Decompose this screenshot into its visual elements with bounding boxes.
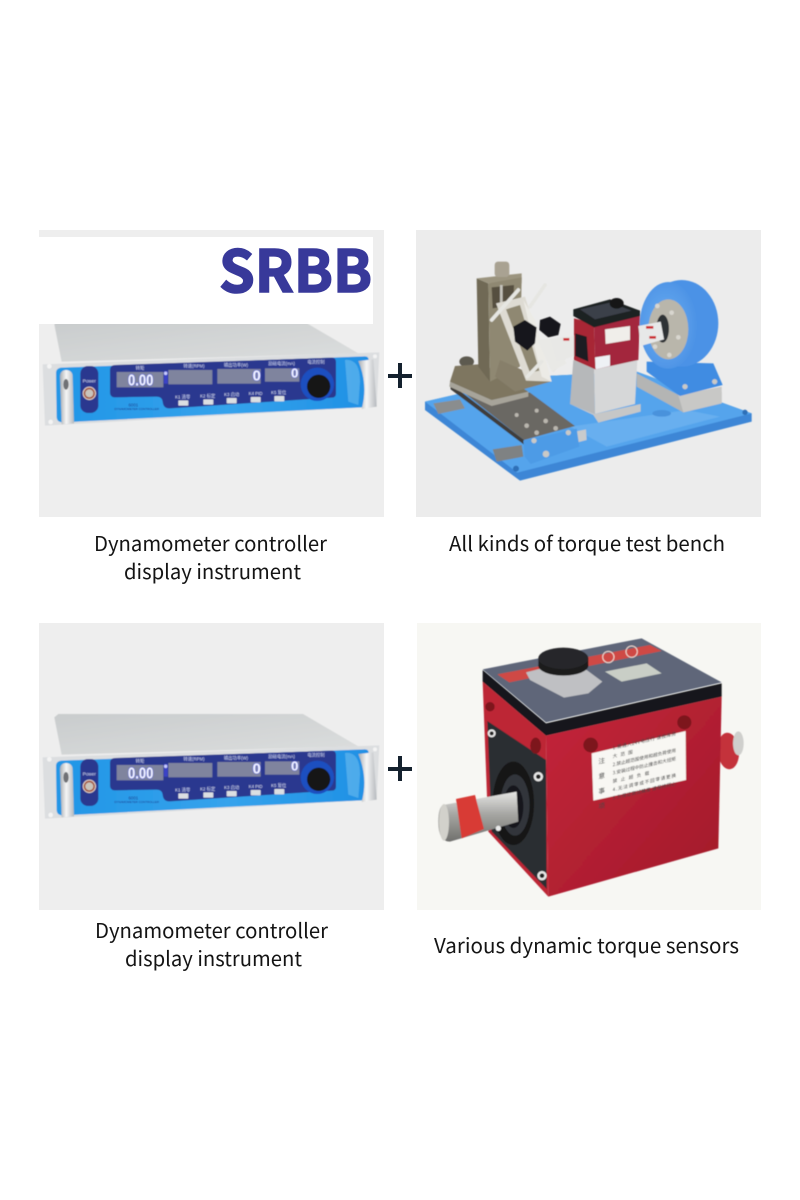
icon: dynamometer controller instrument: 输出功率(W) [224,362,249,369]
dynamometer wheel [637,280,723,417]
icon: dynamometer controller instrument: 0 [253,761,261,777]
icon: dynamometer controller instrument: 0.00 [128,765,153,782]
safety label text: 事 [598,784,605,796]
icon: dynamometer controller instrument: Power [83,379,96,384]
panel: controller bottom [39,623,384,910]
cross table and column [449,262,551,406]
icon: dynamometer controller instrument: K3 启动 [224,391,240,398]
tilting frame and bolts [492,285,585,382]
icon: dynamometer controller instrument: 0.00 [128,372,153,389]
icon: dynamometer controller instrument: 转矩 [136,757,145,764]
icon: dynamometer controller instrument: K1 清零 [175,786,191,793]
safety label text: 1.需通入24V电压行 请按库房 [613,730,676,752]
icon: dynamometer controller instrument: DYNAMOMETER CONTROLLER [114,800,160,804]
icon: dynamometer controller instrument: 励磁电流(mA) [268,753,296,760]
icon: dynamometer controller instrument: Power [83,772,96,777]
flange and shaft [438,762,534,845]
panel: torque test bench [416,230,761,517]
far shaft [716,731,744,770]
caption: controller top: Dynamometer controller [94,527,327,557]
safety label text: 3.安装过程中防止撞击和大扭矩 [613,755,676,777]
safety label text: 意 [598,769,605,781]
safety label text: 4.无法调零或不回零请更换 [613,772,676,793]
panel: dynamic torque sensor [417,623,761,910]
sliding table [433,382,587,464]
safety label text: 2.禁止超范围使用和超负荷使用 [613,747,676,768]
inline torque sensor [570,298,641,423]
icon: dynamometer controller instrument: K4 PID [249,784,263,789]
icon: dynamometer controller instrument: K2 标定 [200,785,216,792]
icon: dynamometer controller instrument [43,321,379,426]
icon: plus sign top [388,363,412,388]
safety label text [598,730,676,811]
caption: controller top [94,527,327,585]
icon: dynamometer controller instrument: 0 [291,759,298,774]
safety label text: 大范围 [613,748,633,760]
panel: controller with logo [39,225,384,517]
icon: dynamometer controller instrument: 电流控制 [307,752,325,759]
icon: dynamometer controller instrument: DYNAMOMETER CONTROLLER [114,407,160,411]
icon: dynamometer controller instrument: K2 标定 [200,392,216,399]
logo: SRBB [219,225,372,309]
icon: dynamometer controller instrument: 0 [253,368,261,384]
icon: dynamometer controller instrument: 转速(RPM) [183,756,205,763]
safety label text: 禁止超负载 [613,770,650,785]
caption: controller bottom: display instrument [125,942,302,972]
icon: dynamometer controller instrument: K5 复位 [271,782,287,789]
icon: plus sign bottom [388,756,412,781]
icon: dynamometer controller instrument: 0 [291,366,298,381]
safety label text: 注 [598,754,605,766]
icon: dynamometer controller instrument: 转速(RPM) [183,363,205,370]
icon: dynamometer controller instrument [43,714,379,819]
icon: torque test bench [425,262,752,481]
safety label text: 5.为保证测试精度 请保持同心 [613,780,676,802]
caption: controller top: display instrument [124,555,301,585]
icon: dynamometer controller instrument: 励磁电流(mA) [268,360,296,367]
caption: controller bottom [95,914,328,972]
caption: test bench: All kinds of torque test bench [449,527,725,557]
icon: dynamometer controller instrument: K4 PID [249,391,263,396]
caption: controller bottom: Dynamometer controller [95,914,328,944]
icon: dynamometer controller instrument: 转矩 [136,364,145,371]
icon: dynamometer controller instrument: K1 清零 [175,393,191,400]
safety label text: 项 [598,799,605,811]
caption: torque sensors: Various dynamic torque sensors [434,929,739,959]
icon: dynamometer controller instrument: 输出功率(W) [224,755,249,762]
icon: torque sensor [438,638,744,897]
icon: dynamometer controller instrument: 6001 [129,795,139,800]
icon: dynamometer controller instrument: 6001 [129,402,139,407]
icon: dynamometer controller instrument: K5 复位 [271,389,287,396]
icon: dynamometer controller instrument: K3 启动 [224,784,240,791]
logo [39,225,373,324]
icon: dynamometer controller instrument: 电流控制 [307,359,325,366]
